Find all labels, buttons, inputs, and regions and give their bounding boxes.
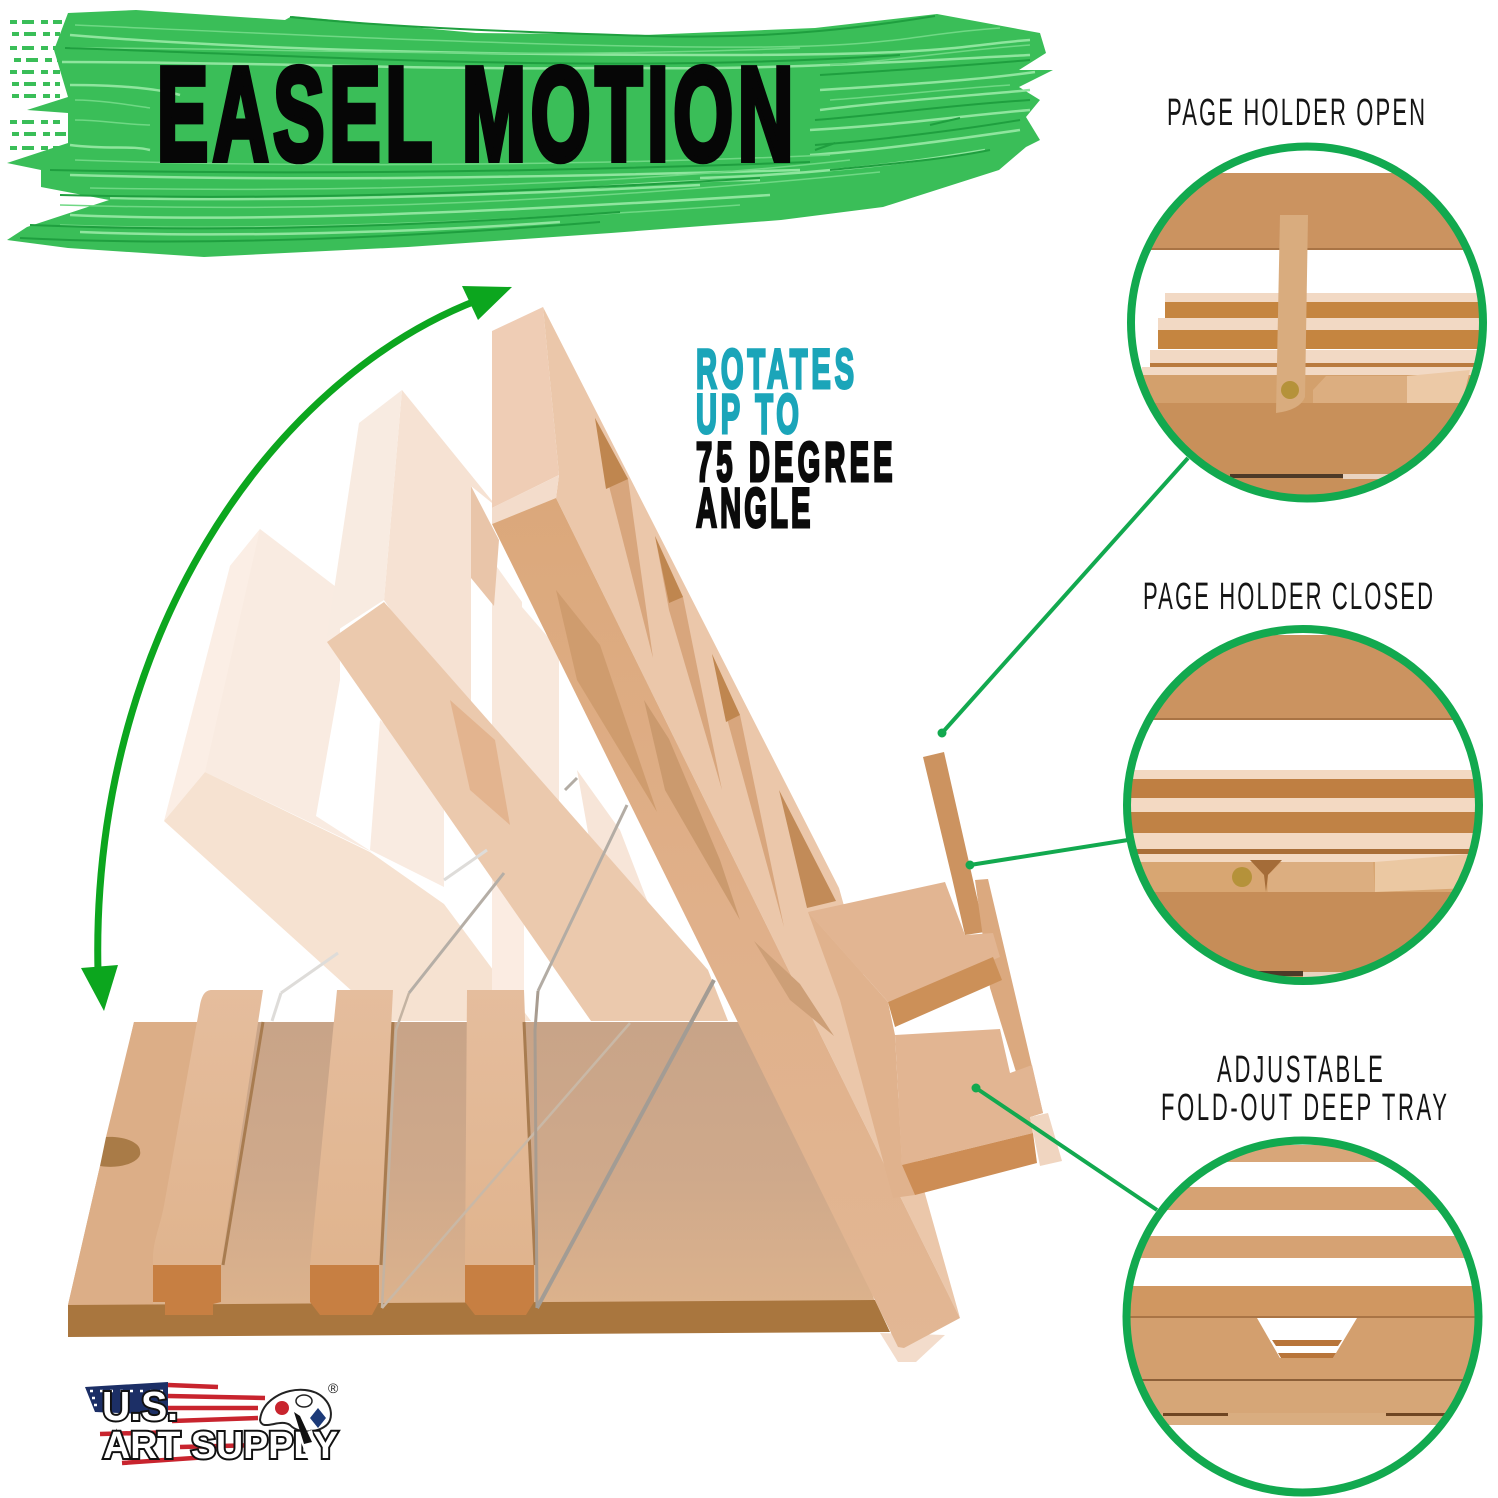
logo wordmark: ART SUPPLY bbox=[103, 1425, 338, 1467]
front edge shading bbox=[556, 590, 834, 1036]
detail circle: page holder open bbox=[1120, 146, 1490, 498]
brush highlights bbox=[62, 35, 1035, 234]
base top surface bbox=[68, 1022, 875, 1305]
tray left strip bbox=[808, 912, 915, 1198]
logo flag canton bbox=[85, 1382, 168, 1415]
ridge 3 bbox=[465, 990, 535, 1315]
logo registered mark: ® bbox=[328, 1380, 339, 1396]
board front edge bbox=[492, 498, 960, 1348]
base finger notch bbox=[100, 1137, 140, 1167]
label: adjustable fold-out deep tray bbox=[1161, 1048, 1447, 1129]
rotation callout text bbox=[696, 339, 893, 540]
ridge 1 bbox=[153, 990, 263, 1315]
wires over base bbox=[382, 980, 714, 1308]
detail circle: fold-out deep tray bbox=[1120, 1140, 1490, 1492]
logo flag stars bbox=[90, 1391, 165, 1405]
slat gaps bbox=[595, 418, 836, 927]
board top surface bbox=[543, 307, 960, 1318]
ghost easel position 2 bbox=[327, 390, 728, 1022]
ridge 2 bbox=[310, 990, 393, 1315]
logo paint brush bbox=[294, 1412, 320, 1464]
arrow: rotation arc bbox=[81, 286, 512, 1011]
tray right rail bbox=[975, 879, 1043, 1117]
callout line: page holder open bbox=[938, 458, 1188, 737]
rotation callout text: ROTATES bbox=[696, 339, 854, 401]
wire supports bbox=[272, 778, 627, 1021]
base front edge bbox=[68, 1300, 890, 1337]
tray front lip bbox=[902, 1133, 1037, 1195]
tray upper plate bbox=[808, 882, 1000, 1002]
callout line: page holder closed bbox=[966, 840, 1128, 869]
tray lower plate bbox=[895, 1029, 1043, 1165]
ghost board foot under main board bbox=[880, 1333, 945, 1362]
ghost easel position 1 bbox=[164, 529, 531, 1021]
base board with ridges bbox=[68, 990, 890, 1337]
tray strut bbox=[888, 957, 1002, 1027]
main tilted board bbox=[492, 307, 960, 1348]
rotation callout text: ANGLE bbox=[696, 478, 810, 540]
board end block bbox=[492, 307, 559, 508]
rotation callout text: 75 DEGREE bbox=[696, 432, 893, 494]
brush shadows bbox=[20, 16, 1030, 241]
label: adjustable fold-out deep tray: ADJUSTABLE bbox=[1217, 1048, 1383, 1091]
label: page holder open: PAGE HOLDER OPEN bbox=[1167, 91, 1425, 134]
brush speckle bbox=[10, 22, 66, 148]
heading: EASEL MOTION bbox=[157, 40, 793, 188]
rotation callout text: UP TO bbox=[696, 384, 799, 446]
board end highlight bbox=[492, 475, 559, 524]
logo wordmark: U.S. bbox=[102, 1383, 178, 1429]
logo wordmark bbox=[102, 1383, 338, 1467]
tray ghost corner bbox=[1030, 1113, 1062, 1166]
label: page holder closed: PAGE HOLDER CLOSED bbox=[1143, 575, 1433, 618]
base left margin bbox=[68, 1022, 207, 1305]
detail circle: page holder closed bbox=[1120, 629, 1490, 985]
fold-out tray and page holder bbox=[808, 752, 1062, 1198]
banner: green brush stroke bbox=[7, 10, 1053, 257]
logo flag stripes bbox=[100, 1385, 265, 1463]
fine brush texture bbox=[60, 25, 1030, 227]
label: adjustable fold-out deep tray: FOLD-OUT DEEP TRAY bbox=[1161, 1086, 1447, 1129]
logo palette bbox=[260, 1390, 331, 1431]
callout line: fold-out tray bbox=[972, 1084, 1157, 1210]
page holder arm bbox=[923, 752, 985, 935]
logo: U.S. Art Supply bbox=[85, 1380, 339, 1467]
